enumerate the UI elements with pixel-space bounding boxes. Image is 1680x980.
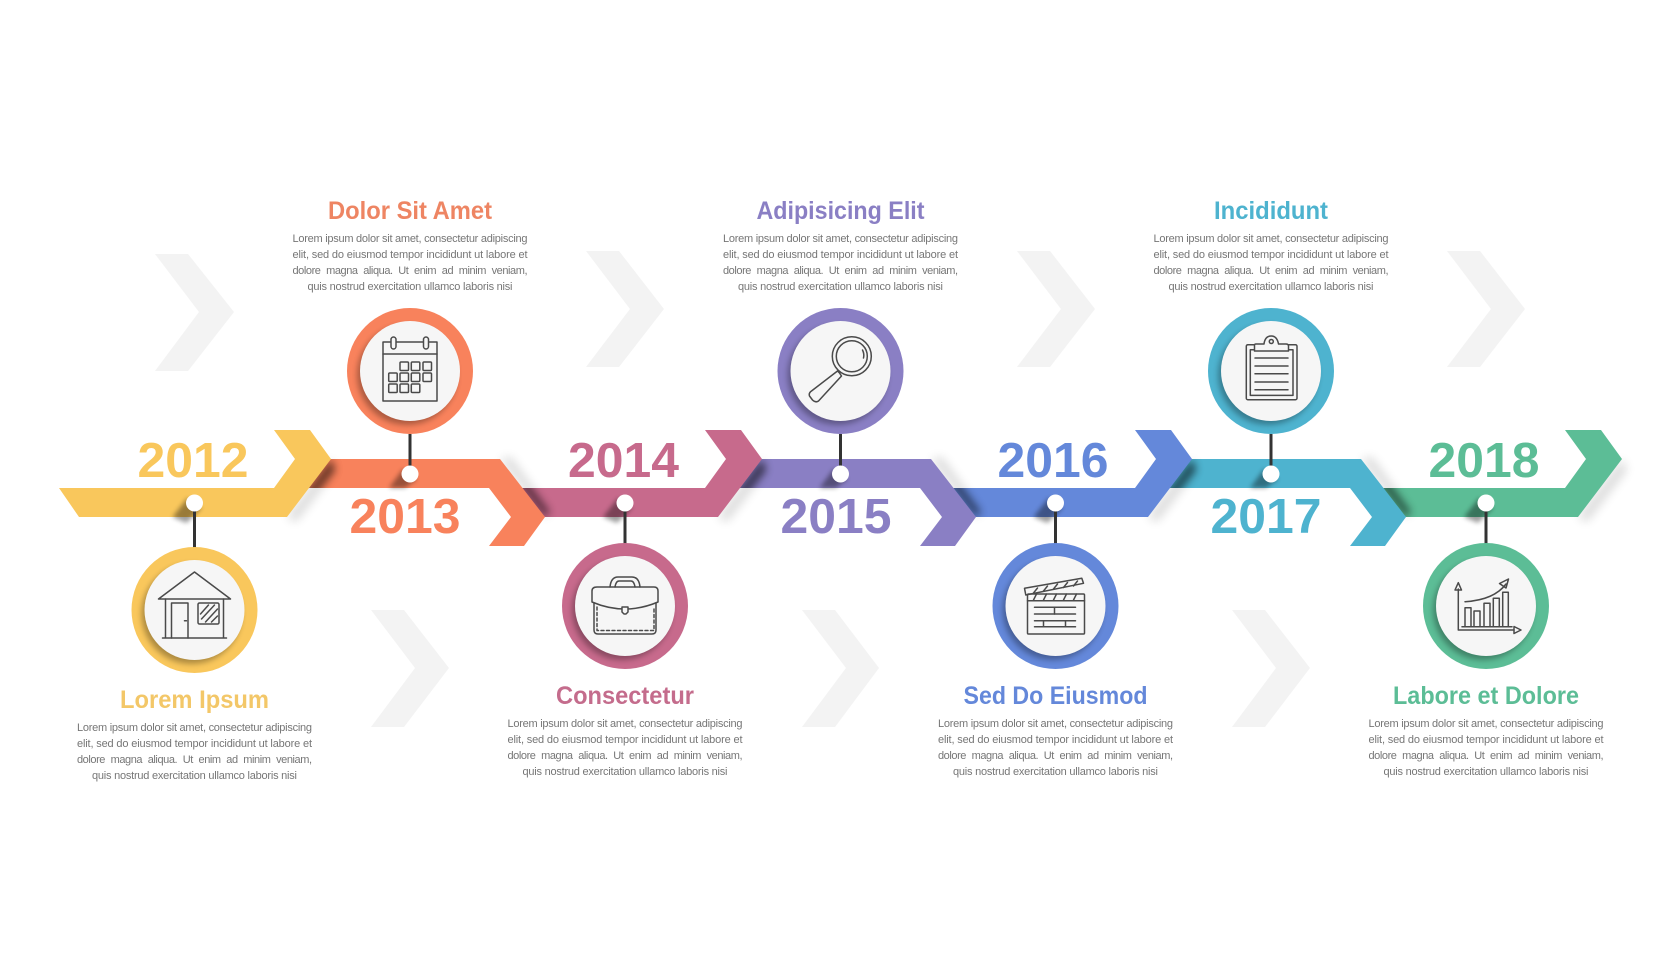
description: elit, sed do eiusmod tempor incididunt ut labore et: [292, 249, 528, 261]
description: Lorem ipsum dolor sit amet, consectetur adipiscing: [938, 718, 1173, 730]
year 2017: 2017: [1210, 490, 1322, 544]
milestone 2014: [508, 434, 742, 778]
badge with magnifier icon: [778, 308, 904, 434]
description: elit, sed do eiusmod tempor incididunt ut labore et: [723, 249, 958, 261]
title: Dolor Sit Amet: [328, 197, 493, 225]
connector and dot: [820, 434, 849, 488]
description: [292, 233, 528, 293]
description: dolore magna aliqua. Ut enim ad minim veniam,: [1154, 265, 1388, 277]
milestone 2016: [938, 434, 1173, 778]
connector and dot: [1464, 494, 1494, 545]
title: Lorem Ipsum: [120, 686, 269, 714]
description: dolore magna aliqua. Ut enim ad minim veniam,: [292, 265, 528, 277]
description: Lorem ipsum dolor sit amet, consectetur adipiscing: [1154, 233, 1388, 245]
description: Lorem ipsum dolor sit amet, consectetur adipiscing: [723, 233, 958, 245]
milestone 2012: [77, 434, 312, 782]
description: dolore magna aliqua. Ut enim ad minim veniam,: [77, 754, 312, 766]
connector and dot: [603, 494, 634, 545]
icon: magnifier: [809, 337, 871, 402]
description: dolore magna aliqua. Ut enim ad minim veniam,: [1368, 750, 1604, 762]
description: Lorem ipsum dolor sit amet, consectetur adipiscing: [508, 718, 742, 730]
title: Sed Do Eiusmod: [964, 682, 1148, 710]
description: [723, 233, 958, 293]
description: [938, 718, 1173, 778]
description: Lorem ipsum dolor sit amet, consectetur adipiscing: [292, 233, 528, 245]
badge with clipboard icon: [1208, 308, 1334, 434]
description: dolore magna aliqua. Ut enim ad minim veniam,: [723, 265, 958, 277]
title: Consectetur: [556, 682, 694, 710]
description: dolore magna aliqua. Ut enim ad minim veniam,: [938, 750, 1173, 762]
description: Lorem ipsum dolor sit amet, consectetur adipiscing: [1368, 718, 1604, 730]
title: Incididunt: [1214, 197, 1329, 225]
connector and dot: [1250, 434, 1280, 488]
badge with chart icon: [1423, 543, 1549, 669]
description: elit, sed do eiusmod tempor incididunt ut labore et: [1154, 249, 1388, 261]
description: dolore magna aliqua. Ut enim ad minim veniam,: [508, 750, 742, 762]
description: elit, sed do eiusmod tempor incididunt ut labore et: [938, 734, 1173, 746]
connector and dot: [172, 494, 203, 549]
badge with briefcase icon: [562, 543, 688, 669]
year 2016: 2016: [998, 434, 1108, 488]
badge with clapperboard icon: [992, 543, 1118, 669]
description: quis nostrud exercitation ullamco laboris nisi: [522, 766, 728, 778]
badge with calendar icon: [347, 308, 473, 434]
description: [1368, 718, 1604, 778]
icon: clapperboard: [1024, 578, 1084, 634]
icon: briefcase: [592, 577, 658, 634]
year 2018: 2018: [1428, 434, 1540, 488]
icon: clipboard: [1246, 336, 1297, 400]
description: quis nostrud exercitation ullamco laboris nisi: [308, 281, 512, 293]
description: [77, 722, 312, 782]
milestone 2015: [723, 197, 958, 544]
year 2013: 2013: [350, 490, 460, 544]
description: elit, sed do eiusmod tempor incididunt ut labore et: [508, 734, 742, 746]
title: Labore et Dolore: [1393, 682, 1579, 710]
milestone 2018: [1368, 434, 1604, 778]
title: Adipisicing Elit: [756, 197, 925, 225]
year 2012: 2012: [138, 434, 248, 488]
description: quis nostrud exercitation ullamco laboris nisi: [1384, 766, 1588, 778]
year 2015: 2015: [780, 490, 892, 544]
description: quis nostrud exercitation ullamco laboris nisi: [738, 281, 943, 293]
connector and dot: [389, 434, 418, 488]
year 2014: 2014: [568, 434, 679, 488]
description: quis nostrud exercitation ullamco laboris nisi: [953, 766, 1158, 778]
description: Lorem ipsum dolor sit amet, consectetur adipiscing: [77, 722, 312, 734]
connector and dot: [1034, 494, 1064, 545]
icon: calendar: [383, 337, 437, 401]
description: elit, sed do eiusmod tempor incididunt ut labore et: [77, 738, 312, 750]
background chevrons: [155, 251, 1525, 727]
description: elit, sed do eiusmod tempor incididunt ut labore et: [1368, 734, 1604, 746]
arrow ribbon: [59, 430, 1627, 546]
icon: growth chart: [1455, 579, 1521, 634]
description: [508, 718, 742, 778]
description: quis nostrud exercitation ullamco laboris nisi: [1168, 281, 1374, 293]
milestone 2017: [1154, 197, 1388, 544]
description: [1154, 233, 1388, 293]
badge with house icon: [132, 547, 258, 673]
milestone 2013: [292, 197, 528, 544]
description: quis nostrud exercitation ullamco laboris nisi: [92, 770, 297, 782]
icon: house: [158, 572, 230, 638]
